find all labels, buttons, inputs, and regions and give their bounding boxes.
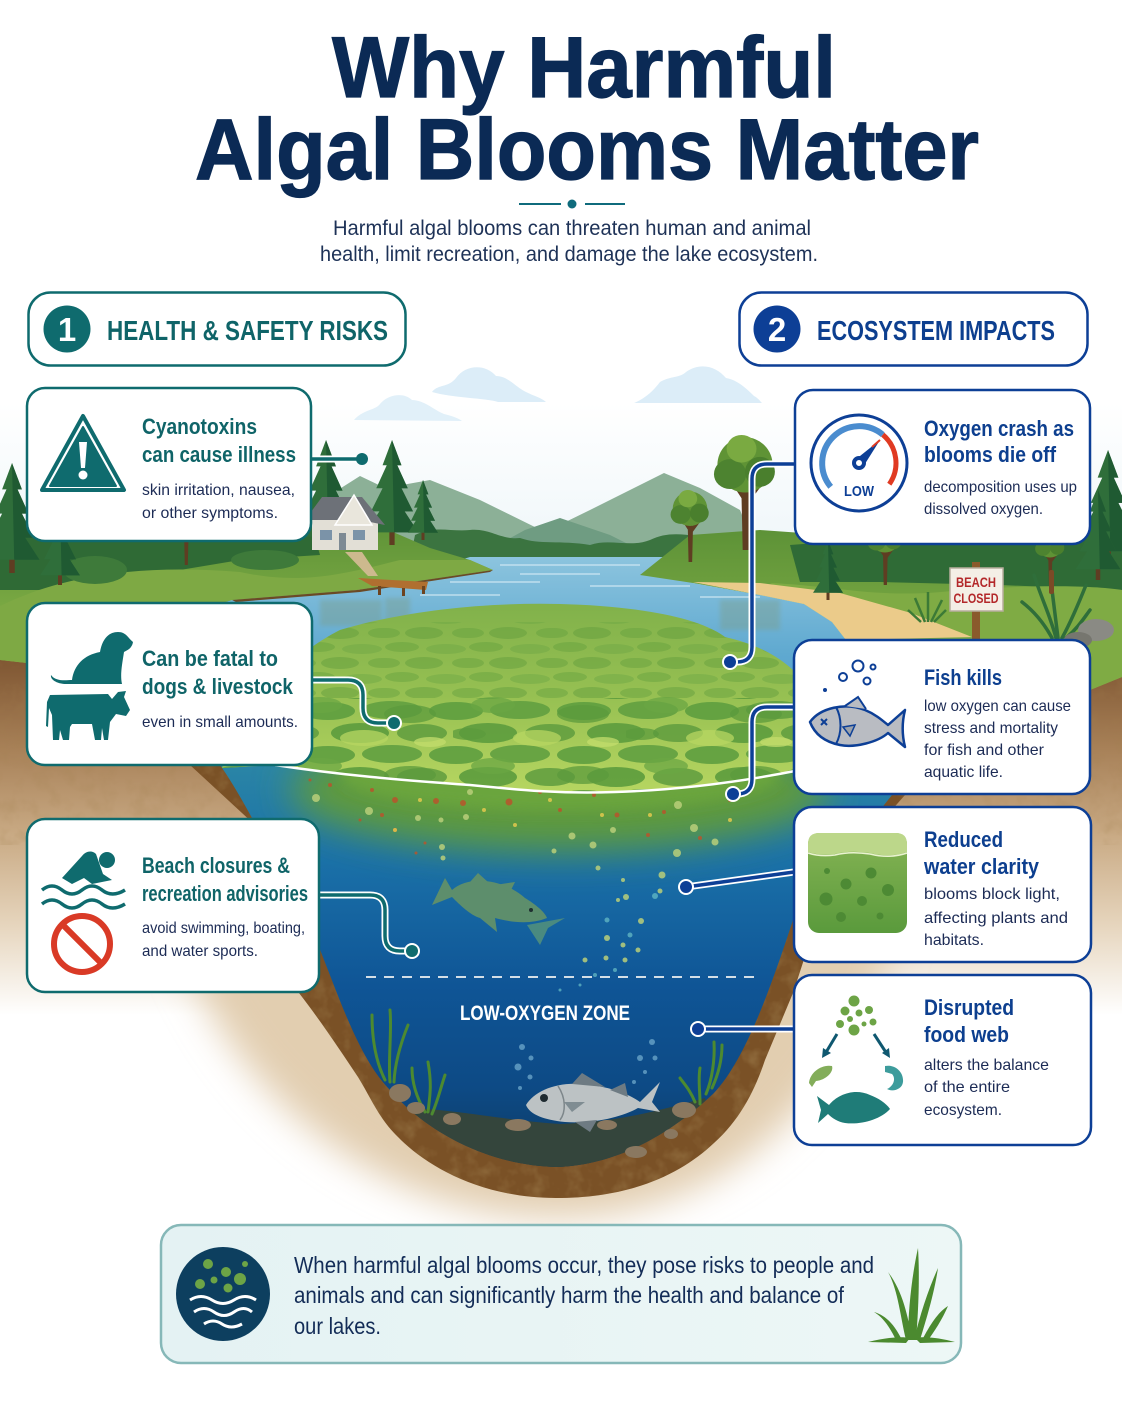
far shore treeline: [410, 529, 720, 560]
connector: oxygen crash: [722, 464, 795, 670]
card text: Can be fatal to: [142, 646, 278, 671]
panel: reduced water clarity: [794, 807, 1091, 962]
icon: wooden dock: [358, 578, 428, 596]
card text: [142, 414, 296, 522]
card text: stress and mortality: [924, 720, 1058, 737]
subtitle: health, limit recreation, and damage the lake ecosystem.: [320, 243, 818, 266]
panel: disrupted food web: [794, 975, 1091, 1145]
panel: fish kills: [794, 640, 1090, 794]
card text: can cause illness: [142, 442, 296, 467]
card text: alters the balance: [924, 1057, 1049, 1074]
right shore land: [640, 435, 1122, 690]
connector: dogs and livestock: [312, 680, 402, 731]
card text: skin irritation, nausea,: [142, 482, 295, 499]
section heading: health and safety risks: 1: [58, 311, 76, 348]
card text: habitats.: [924, 932, 984, 949]
card text: [923, 827, 1068, 949]
subtitle: Harmful algal blooms can threaten human and animal: [333, 217, 811, 240]
suspended algae particles: [308, 778, 732, 992]
card text: Oxygen crash as: [924, 416, 1074, 441]
label: low-oxygen zone: LOW-OXYGEN ZONE: [460, 1002, 630, 1025]
lake surface: [200, 557, 900, 800]
card text: [142, 646, 298, 731]
icon: warning triangle: [42, 416, 124, 490]
card text: [924, 995, 1049, 1119]
card text: low oxygen can cause: [924, 698, 1071, 715]
title: Why Harmful: [332, 20, 836, 116]
card text: [142, 853, 308, 960]
card text: affecting plants and: [924, 910, 1068, 927]
card text: [924, 665, 1071, 781]
mountains: [300, 473, 760, 560]
card text: Cyanotoxins: [142, 414, 257, 439]
section heading: health and safety risks: HEALTH & SAFETY RISKS: [107, 315, 388, 346]
icon: reeds: [868, 1248, 955, 1343]
icon: green fish mid-water: [432, 873, 565, 945]
card text: for fish and other: [924, 742, 1045, 759]
icon: dead fish with bubbles: [810, 660, 905, 747]
panel: cyanotoxins: [27, 388, 311, 541]
title: [195, 20, 979, 198]
aquatic plants and rocks: [372, 1010, 722, 1158]
title divider ornament: [519, 200, 625, 208]
connector: beach closures: [319, 895, 420, 959]
section heading: ecosystem impacts: [740, 292, 1088, 366]
icon: oxygen gauge: LOW: [844, 483, 875, 500]
lake basin soil rim: [190, 760, 910, 1200]
section heading: ecosystem impacts: 2: [768, 311, 786, 348]
sediment bed: [415, 1098, 706, 1167]
icon: algae over water: [176, 1247, 270, 1341]
connector: food web: [690, 1021, 794, 1037]
lake cross-section water: [220, 766, 892, 1167]
card text: Fish kills: [924, 665, 1002, 690]
icon: cattails and rocks: [908, 570, 1114, 648]
subtitle: [320, 217, 818, 266]
icon: beach closed sign: CLOSED: [954, 590, 998, 606]
card text: food web: [924, 1022, 1009, 1047]
card text: and water sports.: [142, 943, 258, 960]
conclusion text: animals and can significantly harm the health and balance of: [294, 1282, 845, 1308]
conclusion text: [294, 1252, 874, 1339]
card text: avoid swimming, boating,: [142, 920, 305, 937]
icon: beach closed sign: [950, 562, 1003, 640]
card text: dissolved oxygen.: [924, 501, 1043, 518]
low-oxygen zone boundary: [366, 976, 754, 978]
card text: Reduced: [924, 827, 1003, 852]
background sky: [0, 0, 1122, 560]
card text: aquatic life.: [924, 764, 1003, 781]
bubbles near lake bottom: [514, 1039, 658, 1090]
card text: recreation advisories: [142, 881, 308, 906]
icon: beach closed sign: BEACH: [956, 574, 996, 590]
panel: fatal to animals: [27, 603, 312, 765]
icon: grey fish on lake bottom: [526, 1073, 660, 1132]
card text: even in small amounts.: [142, 714, 298, 731]
card text: dogs & livestock: [142, 674, 294, 699]
card text: [924, 416, 1077, 518]
icon: prohibition sign: [54, 916, 110, 972]
card text: ecosystem.: [924, 1102, 1002, 1119]
card text: blooms die off: [924, 442, 1057, 467]
card text: decomposition uses up: [924, 479, 1077, 496]
section heading: health and safety risks: [28, 292, 406, 366]
panel: beach closures: [27, 819, 319, 992]
section heading: ecosystem impacts: ECOSYSTEM IMPACTS: [817, 315, 1055, 346]
panel: conclusion callout: [161, 1225, 961, 1363]
left shore land: [0, 440, 493, 663]
icon: murky water sample: [808, 833, 907, 933]
icon: food web cycle: [809, 996, 903, 1123]
connector: cyanotoxins: [311, 453, 368, 465]
icon: oxygen gauge: [811, 415, 907, 511]
connector: water clarity: [678, 872, 794, 895]
icon: swimmer: [42, 852, 125, 908]
connector: fish kills: [725, 707, 794, 802]
card text: blooms block light,: [924, 886, 1060, 903]
conclusion text: our lakes.: [294, 1313, 381, 1339]
card text: Beach closures &: [142, 853, 290, 878]
clouds: [354, 366, 762, 421]
soil cross-section: [0, 655, 1122, 1218]
conclusion text: When harmful algal blooms occur, they pose risks to people and: [294, 1252, 874, 1278]
card text: or other symptoms.: [142, 505, 278, 522]
card text: Disrupted: [924, 995, 1014, 1020]
icon: dog and cow: [46, 632, 133, 740]
title: Algal Blooms Matter: [195, 102, 979, 198]
panel: oxygen crash: [795, 390, 1090, 544]
icon: lakeside house: [305, 495, 385, 576]
card text: water clarity: [923, 854, 1040, 879]
algae mat surface: [222, 604, 793, 794]
card text: of the entire: [924, 1079, 1010, 1096]
